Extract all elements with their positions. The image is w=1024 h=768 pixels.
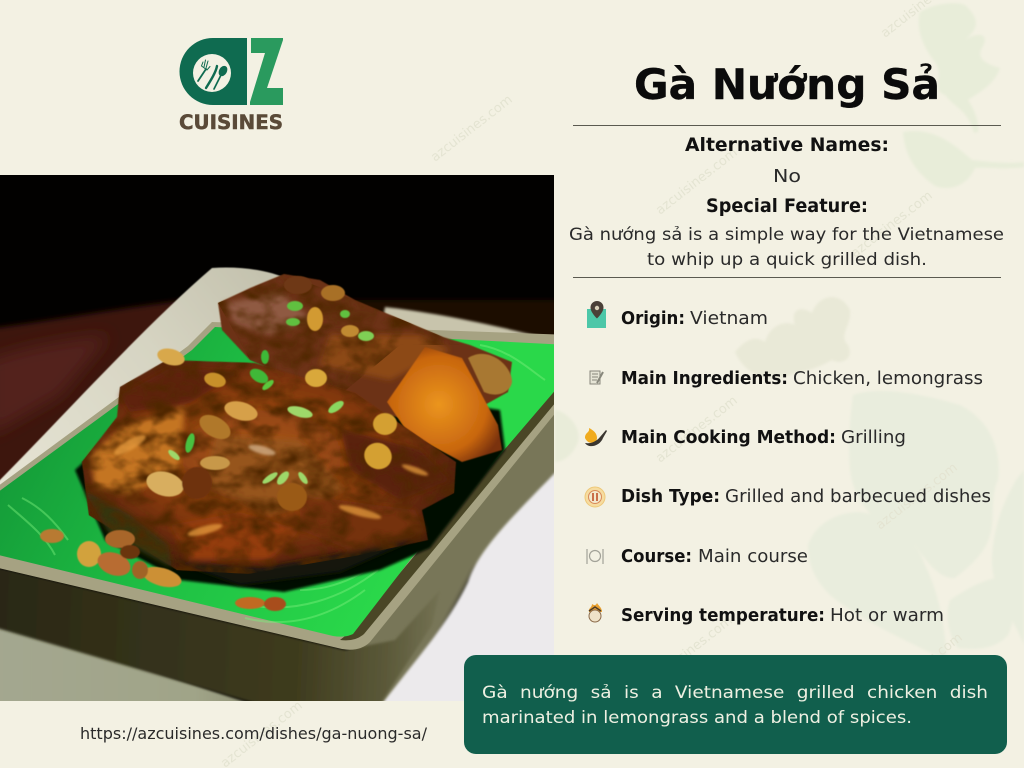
right white table	[382, 472, 554, 701]
sage table foreground	[0, 627, 247, 701]
icon: map pin	[587, 301, 606, 328]
rear chicken piece	[218, 274, 512, 430]
top divider	[573, 125, 1001, 126]
rear dark haze	[354, 298, 554, 334]
fact row: course	[587, 546, 808, 567]
rear chicken tail	[468, 354, 512, 395]
chicken surface texture	[82, 360, 456, 574]
serving temperature value: Hot or warm	[830, 605, 944, 626]
bottom divider	[573, 277, 1001, 278]
callout text line 1: Gà nướng sả is a Vietnamese grilled chicken dish	[482, 683, 988, 703]
course label: Course:	[621, 546, 692, 567]
special feature heading: Special Feature:	[706, 195, 868, 217]
watermarks: azcuisines.com	[428, 92, 516, 165]
photo backdrop	[0, 165, 564, 711]
shadow beneath plate	[0, 568, 434, 701]
olive table band right of plate	[354, 414, 554, 701]
logo: AZ Cuisines	[179, 38, 283, 134]
white napkin	[0, 266, 281, 485]
cooking method value: Grilling	[841, 427, 906, 448]
inner plate dark band	[340, 392, 554, 640]
watermarks: azcuisines.com	[873, 460, 961, 533]
special feature text line 1: Gà nướng sả is a simple way for the Vietnamese	[569, 225, 1004, 245]
banana leaf	[0, 327, 570, 637]
food photo: grilled lemongrass chicken	[0, 165, 575, 720]
cooking method label: Main Cooking Method:	[621, 427, 836, 448]
icon: flaming pan	[585, 428, 607, 446]
fact row: main ingredients	[590, 368, 983, 389]
text block: alternative names and special feature	[569, 134, 1004, 270]
main ingredients label: Main Ingredients:	[621, 368, 788, 389]
fact row: origin	[587, 301, 768, 329]
dish type label: Dish Type:	[621, 486, 720, 507]
fact row: dish type	[585, 486, 991, 507]
fact row: serving temperature	[589, 603, 944, 626]
peanuts	[40, 276, 397, 611]
logo letter z	[250, 38, 283, 105]
alternative names heading: Alternative Names:	[685, 134, 889, 156]
serving temperature label: Serving temperature:	[621, 605, 825, 626]
plate rim	[0, 322, 570, 650]
tablecloth blur	[0, 298, 178, 480]
watermarks	[218, 0, 966, 768]
origin label: Origin:	[621, 308, 685, 329]
icon: hot dish flame	[589, 603, 602, 622]
watermarks: azcuisines.com	[848, 188, 936, 261]
callout background	[464, 655, 1007, 754]
summary callout	[464, 655, 1007, 754]
fact row: main cooking method	[585, 427, 906, 448]
watermarks: azcuisines.com	[653, 145, 741, 218]
icon: plate with cutlery	[585, 487, 605, 507]
icon: place setting	[587, 549, 603, 564]
scallion garnish	[167, 301, 374, 487]
special feature text line 2: to whip up a quick grilled dish.	[647, 250, 927, 270]
logo wordmark: CUISINES	[179, 111, 283, 134]
rear chicken texture	[218, 276, 446, 390]
logo utensils	[198, 60, 228, 89]
rear chicken highlight	[225, 292, 312, 335]
dish type value: Grilled and barbecued dishes	[725, 486, 991, 507]
icon: recipe note	[590, 371, 603, 384]
rear chicken glaze	[320, 335, 450, 380]
title: Gà Nướng Sả	[634, 60, 940, 109]
alternative names value: No	[773, 166, 801, 187]
dark shadow under chicken	[74, 406, 506, 594]
leaf veins	[8, 345, 545, 622]
chicken glaze highlights	[84, 368, 450, 585]
source URL: https://azcuisines.com/dishes/ga-nuong-sa/	[80, 724, 428, 743]
watermarks: azcuisines.com	[878, 630, 966, 703]
watermarks: azcuisines.com	[648, 613, 736, 686]
main ingredients value: Chicken, lemongrass	[793, 368, 983, 389]
decorative herb and leaf background	[555, 3, 1024, 660]
logo letter a	[179, 38, 247, 105]
watermarks: azcuisines.com	[653, 393, 741, 466]
course value: Main course	[698, 546, 808, 567]
main chicken piece	[82, 360, 456, 585]
origin value: Vietnam	[690, 308, 768, 329]
roasted potato	[387, 347, 502, 462]
callout text line 2: marinated in lemongrass and a blend of spices.	[482, 708, 912, 728]
chicken glints	[112, 432, 429, 539]
